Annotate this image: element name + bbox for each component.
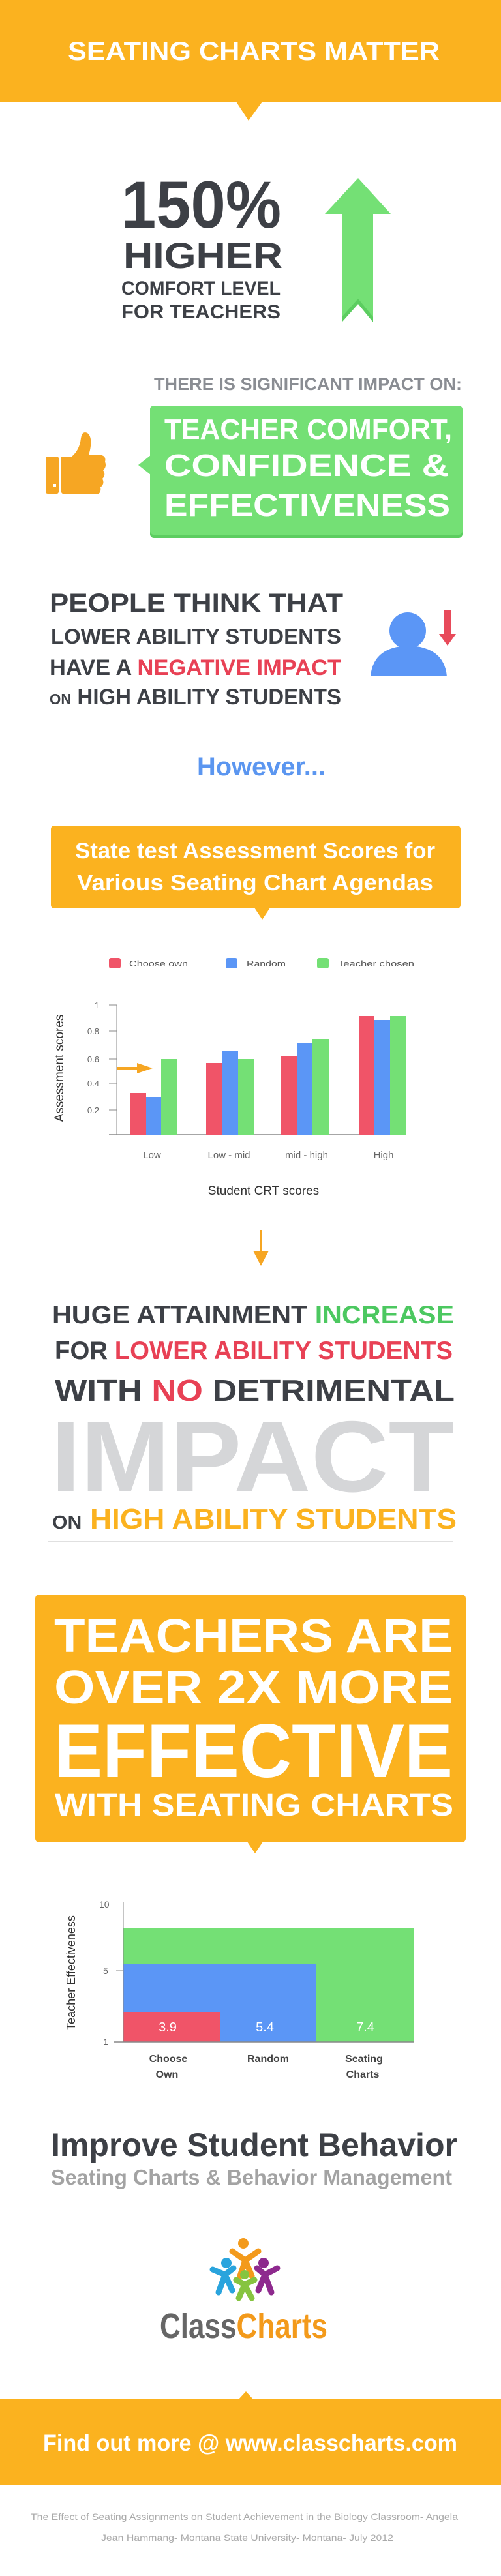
bar chart: teacher effectiveness: 10 (99, 1899, 110, 1910)
text: huge attainment increase: IMPACT (51, 1400, 454, 1513)
text: people think: LOWER ABILITY STUDENTS (51, 625, 341, 648)
bar chart: assessment scores: 0.8 (87, 1026, 99, 1036)
bar chart: assessment scores (53, 958, 414, 1198)
header band (0, 0, 501, 121)
callout: teacher comfort: CONFIDENCE & (164, 449, 449, 483)
arrow: highlight low (117, 1063, 153, 1073)
stat: 150% higher comfort (121, 168, 282, 323)
icon: person with down arrow (371, 610, 456, 676)
bar chart: assessment scores: 0.6 (87, 1055, 99, 1064)
callout: chart title: State test Assessment Scores for (75, 839, 435, 863)
bar chart: teacher effectiveness: Charts (346, 2069, 379, 2080)
legend (109, 958, 414, 968)
text: huge attainment increase (51, 1301, 457, 1535)
heading: improve student behavior: Seating Charts & Behavior Management (51, 2165, 452, 2189)
bar chart: teacher effectiveness: 3.9 (159, 2020, 177, 2035)
arrow: down (253, 1230, 269, 1266)
callout: teachers 2x more effective (35, 1595, 466, 1853)
bar chart: assessment scores: 1 (95, 1000, 99, 1010)
bar chart: assessment scores: High (374, 1150, 393, 1161)
citation (31, 2511, 458, 2543)
callout: teachers 2x more effective: WITH SEATING CHARTS (55, 1788, 453, 1823)
header band: SEATING CHARTS MATTER (68, 37, 440, 66)
legend: Random (247, 959, 286, 968)
callout: teacher comfort (138, 406, 463, 538)
callout: chart title: Various Seating Chart Agendas (77, 871, 433, 895)
bar chart: teacher effectiveness (65, 1899, 414, 2080)
footer band (0, 2391, 501, 2485)
stat: 150% higher comfort: COMFORT LEVEL (121, 278, 281, 299)
bar chart: assessment scores: mid - high (285, 1150, 328, 1161)
text: people think (50, 589, 343, 710)
bar chart: assessment scores: 0.2 (87, 1105, 99, 1115)
callout: teachers 2x more effective: EFFECTIVE (54, 1708, 453, 1793)
bar chart: assessment scores: Low - mid (207, 1150, 250, 1161)
legend: Choose own (129, 959, 188, 968)
text: people think: PEOPLE THINK THAT (50, 589, 343, 618)
heading: improve student behavior (51, 2127, 457, 2189)
logo: ClassCharts (160, 2238, 327, 2346)
bar chart: teacher effectiveness: Seating (345, 2054, 383, 2065)
bar chart: teacher effectiveness: 7.4 (356, 2020, 374, 2035)
icon: green up arrow (325, 178, 391, 322)
legend: Teacher chosen (338, 959, 414, 968)
bar chart: teacher effectiveness: Teacher Effectiveness (65, 1915, 78, 2030)
bar chart: teacher effectiveness: 1 (103, 2037, 108, 2047)
text: however: However... (197, 753, 326, 781)
text: huge attainment increase: HUGE ATTAINMENT INCREASE (52, 1301, 454, 1329)
stat: 150% higher comfort: FOR TEACHERS (121, 301, 281, 323)
bar chart: assessment scores: Low (143, 1150, 161, 1161)
callout: teachers 2x more effective: TEACHERS ARE (54, 1610, 453, 1662)
footer band: Find out more @ www.classcharts.com (43, 2431, 457, 2456)
bar chart: assessment scores: Assessment scores (53, 1015, 67, 1122)
bar chart: teacher effectiveness: 5.4 (256, 2020, 274, 2035)
callout: teachers 2x more effective: OVER 2X MORE (54, 1662, 453, 1714)
text: huge attainment increase: ON HIGH ABILITY STUDENTS (52, 1503, 457, 1535)
subheading: significant impact: THERE IS SIGNIFICANT IMPACT ON: (154, 374, 462, 394)
icon: thumbs up (46, 432, 106, 494)
citation: The Effect of Seating Assignments on Student Achievement in the Biology Classroom- Angela (31, 2511, 458, 2522)
text: huge attainment increase: FOR LOWER ABILITY STUDENTS (55, 1337, 453, 1365)
bar chart: teacher effectiveness: 5 (103, 1966, 108, 1976)
callout: chart title (51, 826, 461, 920)
stat: 150% higher comfort: HIGHER (123, 235, 282, 276)
logo: ClassCharts: ClassCharts (160, 2307, 327, 2346)
stat: 150% higher comfort: 150% (121, 168, 281, 242)
bar chart: teacher effectiveness: Random (247, 2054, 289, 2065)
text: people think: ON HIGH ABILITY STUDENTS (50, 685, 341, 710)
citation: Jean Hammang- Montana State University- Montana- July 2012 (101, 2532, 393, 2543)
bar chart: teacher effectiveness: Choose (149, 2054, 187, 2065)
heading: improve student behavior: Improve Student Behavior (51, 2127, 457, 2163)
callout: teacher comfort: TEACHER COMFORT, (164, 413, 452, 445)
callout: teacher comfort: EFFECTIVENESS (164, 488, 450, 523)
bar chart: assessment scores: Student CRT scores (208, 1184, 319, 1198)
text: people think: HAVE A NEGATIVE IMPACT (50, 655, 341, 680)
bar chart: teacher effectiveness: Own (156, 2069, 178, 2080)
text: huge attainment increase: WITH NO DETRIMENTAL (55, 1373, 455, 1407)
bar chart: assessment scores: 0.4 (87, 1079, 99, 1088)
